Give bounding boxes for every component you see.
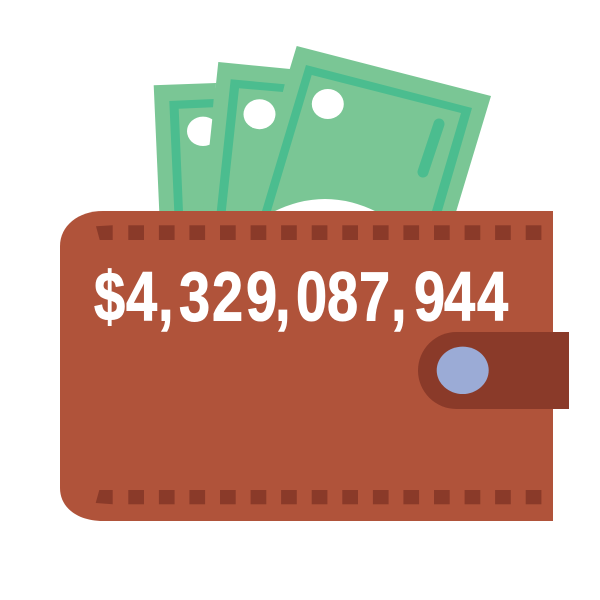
clasp button <box>437 347 489 394</box>
bottom stitching <box>96 490 541 504</box>
wallet clasp <box>418 332 569 409</box>
wallet body <box>60 211 553 521</box>
banknotes <box>154 46 491 212</box>
amount text: $4,329,087,944 <box>94 259 508 336</box>
left banknote <box>154 83 219 212</box>
top stitching <box>96 225 541 240</box>
front banknote <box>247 46 491 212</box>
middle banknote <box>202 62 290 212</box>
